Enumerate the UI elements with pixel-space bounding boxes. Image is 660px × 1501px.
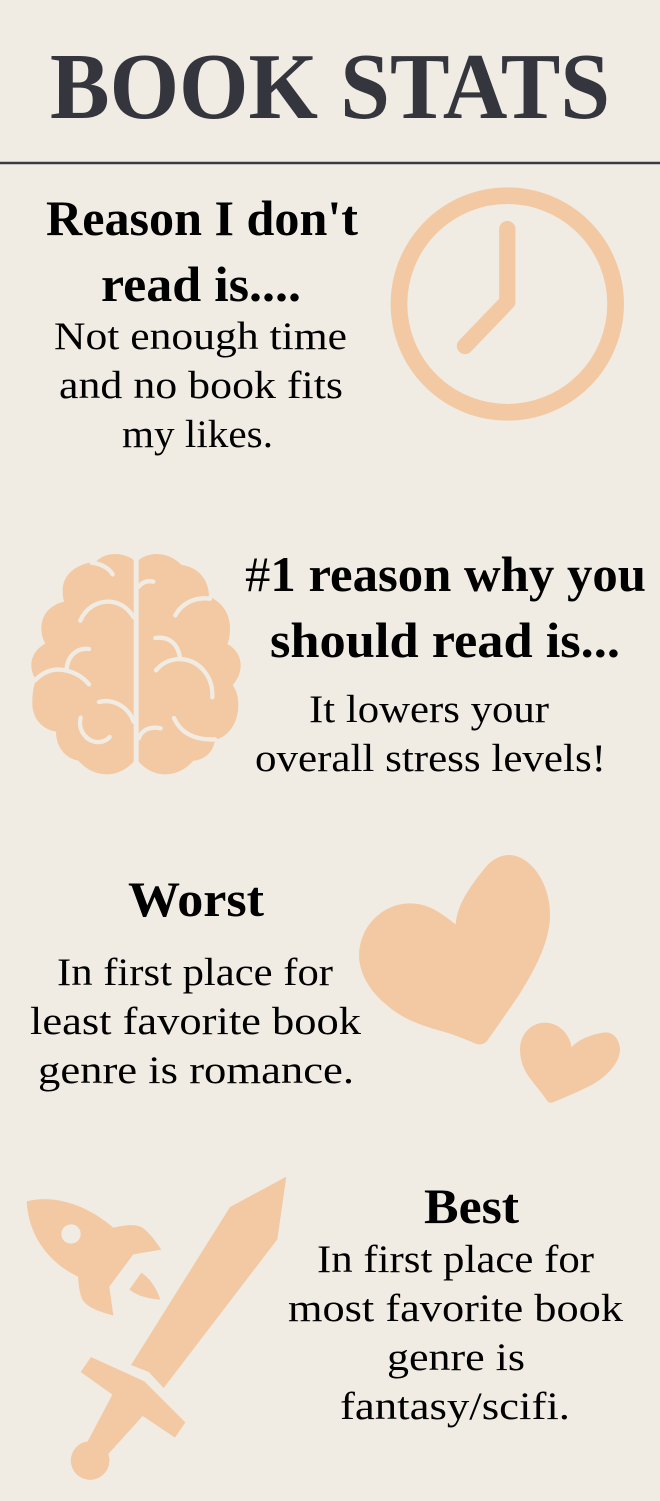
text block: least favorite genre: least favorite book xyxy=(30,1000,362,1043)
text block: least favorite genre: genre is romance. xyxy=(38,1049,354,1092)
text block: lowers stress: It lowers your xyxy=(309,688,549,731)
text block: not enough time: Not enough time xyxy=(54,315,347,358)
text block: most favorite genre: fantasy/scifi. xyxy=(340,1385,570,1428)
heading: number one reason: should read is... xyxy=(270,612,620,668)
icon: sword xyxy=(71,1177,286,1480)
panel: reason for not reading xyxy=(46,190,616,456)
text block: lowers stress xyxy=(255,688,606,780)
title: BOOK STATS xyxy=(50,35,610,139)
text block: most favorite genre xyxy=(288,1238,624,1428)
heading: best: Best xyxy=(424,1178,519,1234)
heading: reason I don't read xyxy=(46,190,358,312)
heading: number one reason: #1 reason why you xyxy=(245,546,646,602)
heading: worst: Worst xyxy=(128,871,264,927)
text block: least favorite genre: In first place for xyxy=(57,951,333,994)
text block: most favorite genre: In first place for xyxy=(317,1238,594,1281)
text block: lowers stress: overall stress levels! xyxy=(255,737,606,780)
icon: hearts xyxy=(359,855,620,1103)
icon: rocket xyxy=(27,1199,161,1316)
text block: most favorite genre: most favorite book xyxy=(288,1287,624,1330)
text block: not enough time: my likes. xyxy=(122,413,273,456)
panel: reason to read xyxy=(31,546,646,780)
icon: clock xyxy=(399,196,616,412)
text block: most favorite genre: genre is xyxy=(387,1336,525,1379)
panel: best genre xyxy=(27,1177,624,1480)
heading: reason I don't read: read is.... xyxy=(101,256,301,312)
heading: reason I don't read: Reason I don't xyxy=(46,190,358,246)
icon: rocket and sword xyxy=(27,1177,286,1480)
text block: not enough time: and no book fits xyxy=(59,364,343,407)
panel: worst genre xyxy=(30,855,620,1103)
text block: not enough time xyxy=(54,315,347,456)
text block: least favorite genre xyxy=(30,951,362,1092)
heading: number one reason xyxy=(245,546,646,668)
icon: brain xyxy=(31,554,241,774)
